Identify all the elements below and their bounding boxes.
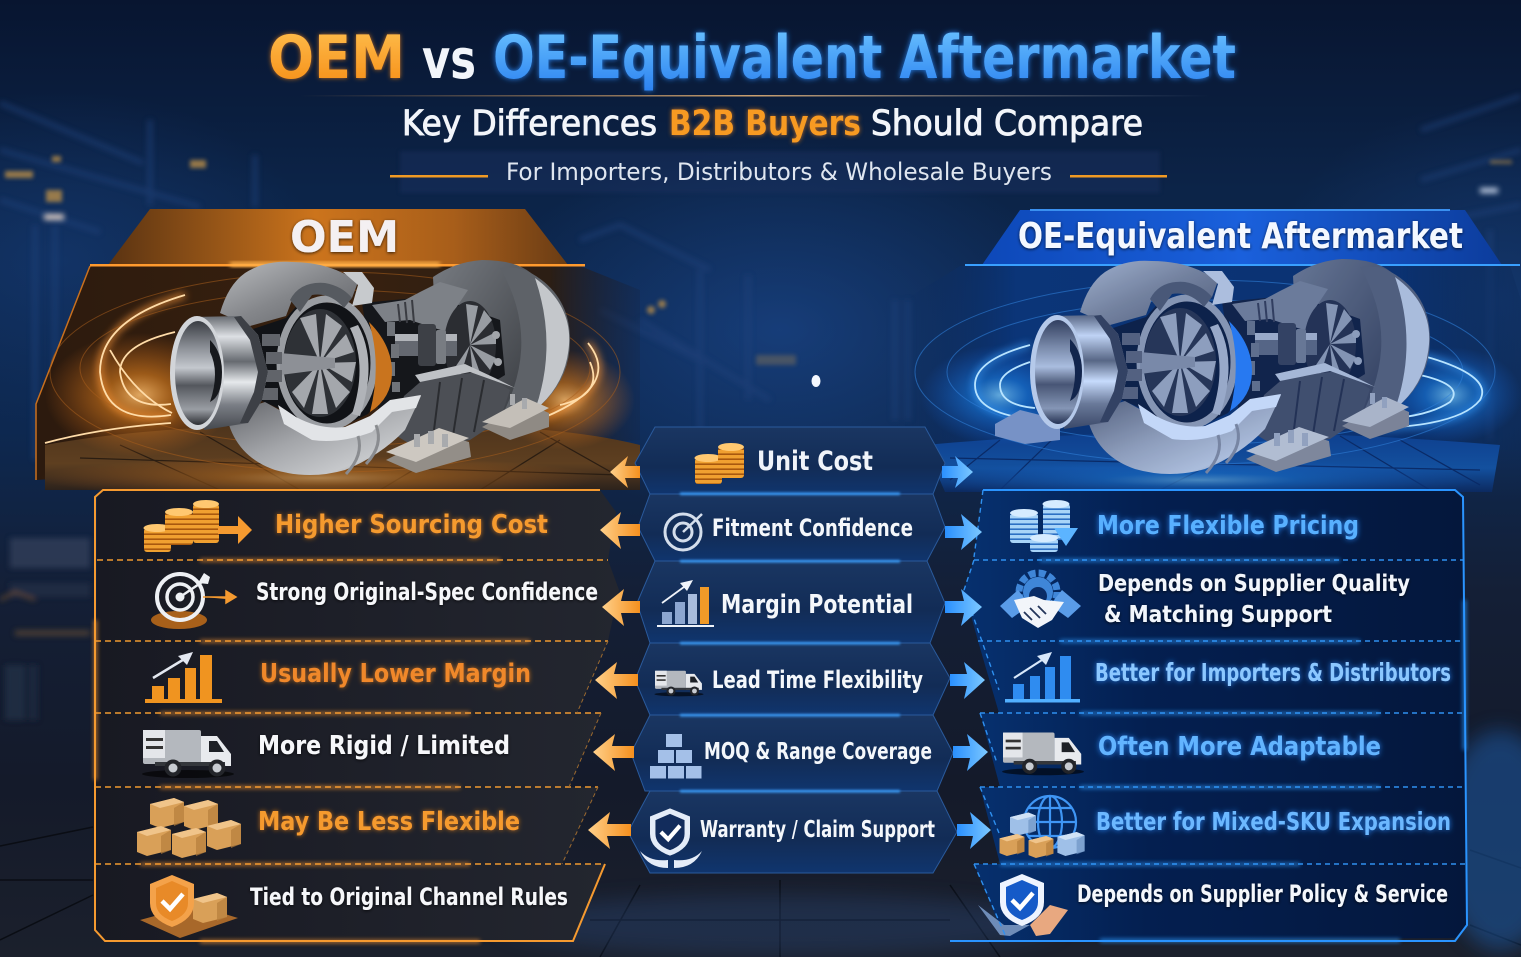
center column: comparison factors (628, 427, 957, 873)
panel: OEM attributes (94, 490, 619, 943)
title: vs (422, 28, 476, 91)
row: depends on supplier quality (964, 560, 1465, 641)
subtitle (402, 104, 1143, 144)
factor: unit cost (635, 427, 945, 494)
subtitle: Should Compare (871, 104, 1143, 144)
illustration: OEM turbocharger (170, 260, 570, 475)
factor: fitment confidence: Fitment Confidence (712, 514, 913, 542)
row: often more adaptable (980, 713, 1465, 787)
factor: warranty and claim support (628, 791, 957, 873)
subtitle: B2B Buyers (669, 104, 861, 144)
row: depends on supplier quality: & Matching Support (1104, 602, 1332, 628)
factor: MOQ and range coverage (631, 715, 953, 791)
row: more rigid / limited (95, 713, 601, 787)
panel: OEM hero (36, 266, 640, 500)
subtitle: Key Differences (402, 104, 657, 144)
row: higher sourcing cost: Higher Sourcing Cost (275, 510, 548, 540)
row: more flexible pricing (974, 490, 1463, 560)
aftermarket energy rings (915, 280, 1495, 464)
row: better for importers (978, 641, 1465, 713)
title: OEM (268, 23, 405, 93)
row: strong original-spec confidence: Strong Original-Spec Confidence (256, 578, 598, 606)
row: more flexible pricing: More Flexible Pricing (1097, 511, 1359, 541)
banner: OEM: OEM (290, 212, 399, 263)
audience tagline (390, 151, 1167, 193)
row: depends on supplier quality: Depends on Supplier Quality (1098, 571, 1410, 597)
center light dot (812, 375, 820, 387)
arrows: toward OEM (588, 456, 640, 849)
factor: margin potential: Margin Potential (721, 590, 913, 620)
title: OE-Equivalent Aftermarket (493, 23, 1236, 93)
row: tied to original channel rules: Tied to Original Channel Rules (250, 883, 568, 911)
factor: MOQ and range coverage: MOQ & Range Coverage (704, 739, 932, 765)
banner: OEM (90, 209, 585, 267)
row: often more adaptable: Often More Adaptable (1098, 732, 1381, 762)
row: better for mixed-SKU expansion (980, 787, 1466, 864)
illustration: aftermarket turbocharger (995, 259, 1430, 474)
row: may be less flexible (95, 787, 598, 864)
factor: unit cost: Unit Cost (757, 446, 873, 477)
panel: Aftermarket hero (905, 266, 1521, 500)
factor: margin potential (637, 561, 945, 643)
factor: lead time flexibility: Lead Time Flexibility (712, 666, 923, 694)
panel: aftermarket attributes (950, 490, 1467, 942)
row: strong original-spec confidence (97, 560, 619, 641)
arrows: toward aftermarket (942, 456, 991, 849)
banner: OE-Equivalent Aftermarket (965, 209, 1520, 266)
row: tied to original channel rules (95, 864, 605, 941)
OEM energy rings (45, 272, 620, 472)
row: higher sourcing cost (97, 490, 616, 560)
factor: lead time flexibility (635, 643, 950, 715)
factor: warranty and claim support: Warranty / Claim Support (700, 817, 935, 843)
factor: fitment confidence (638, 494, 945, 561)
row: depends on supplier policy: Depends on Supplier Policy & Service (1077, 880, 1448, 908)
title (268, 23, 1236, 96)
audience tagline: For Importers, Distributors & Wholesale Buyers (506, 158, 1052, 186)
row: depends on supplier policy (974, 864, 1467, 941)
row: usually lower margin: Usually Lower Margin (260, 659, 531, 689)
row: may be less flexible: May Be Less Flexible (258, 807, 520, 837)
row: more rigid / limited: More Rigid / Limited (258, 731, 510, 761)
row: better for mixed-SKU expansion: Better for Mixed-SKU Expansion (1096, 807, 1451, 836)
row: usually lower margin (95, 641, 608, 713)
